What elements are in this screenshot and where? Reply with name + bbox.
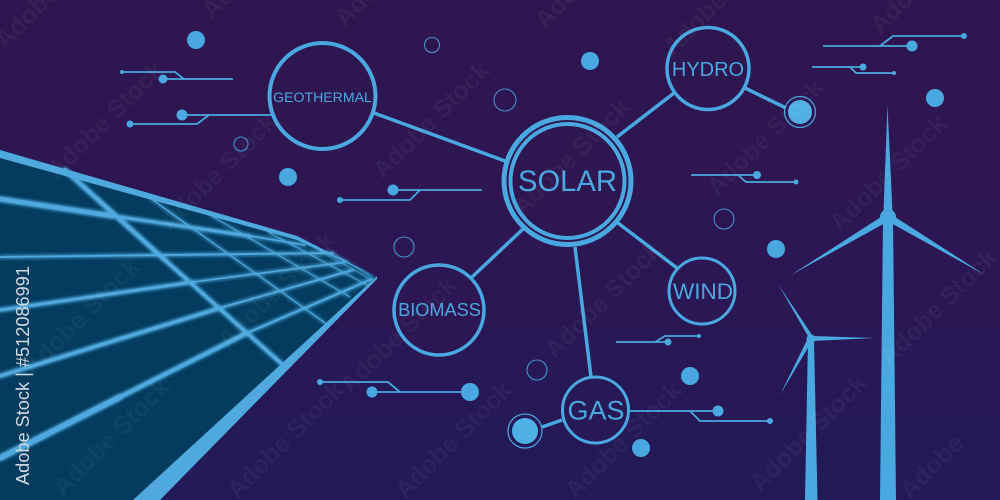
stock watermark pattern: Adobe Stock xyxy=(334,271,462,399)
connector lines xyxy=(374,88,786,427)
stock watermark pattern: Adobe Stock xyxy=(539,236,667,364)
stock watermark pattern: Adobe Stock xyxy=(824,109,952,237)
floating ring outlines xyxy=(234,38,734,380)
large wind turbine xyxy=(791,105,985,500)
stock watermark pattern: Adobe Stock xyxy=(507,93,635,221)
node: gas xyxy=(562,377,628,443)
stock watermark pattern: Adobe Stock xyxy=(212,226,340,354)
circuit end dots xyxy=(120,33,967,424)
gas end node xyxy=(508,414,542,448)
node: wind xyxy=(669,258,735,324)
node: geothermal xyxy=(270,43,376,149)
node: hydro xyxy=(667,28,749,110)
stock watermark pattern: Adobe Stock xyxy=(47,373,175,500)
stock watermark pattern: Adobe Stock xyxy=(17,253,145,381)
stock watermark pattern: Adobe Stock xyxy=(154,108,282,236)
node: biomass xyxy=(394,265,484,355)
stock watermark pattern: Adobe Stock xyxy=(874,243,1000,371)
panel frame xyxy=(0,150,377,277)
node: geothermal: GEOTHERMAL xyxy=(273,89,372,105)
node: hydro: HYDRO xyxy=(672,59,744,81)
node: solar: SOLAR xyxy=(518,166,617,198)
stock watermark pattern: Adobe Stock xyxy=(744,369,872,497)
stock watermark pattern: Adobe Stock xyxy=(41,56,169,184)
small wind turbine xyxy=(778,284,875,500)
solar panel xyxy=(0,150,377,500)
node: gas: GAS xyxy=(567,396,625,426)
floating solid dots xyxy=(187,31,944,457)
node: wind: WIND xyxy=(673,279,733,304)
panel grid lines xyxy=(0,170,372,458)
stock watermark pattern: Adobe Stock xyxy=(367,56,495,184)
node: biomass: BIOMASS xyxy=(398,300,481,320)
stock id side label: Adobe Stock | #512086991 xyxy=(13,266,33,485)
stock watermark pattern: Adobe Stock xyxy=(701,73,829,201)
circuit traces xyxy=(122,36,964,421)
node: solar xyxy=(504,118,631,244)
hydro end node xyxy=(784,96,816,128)
